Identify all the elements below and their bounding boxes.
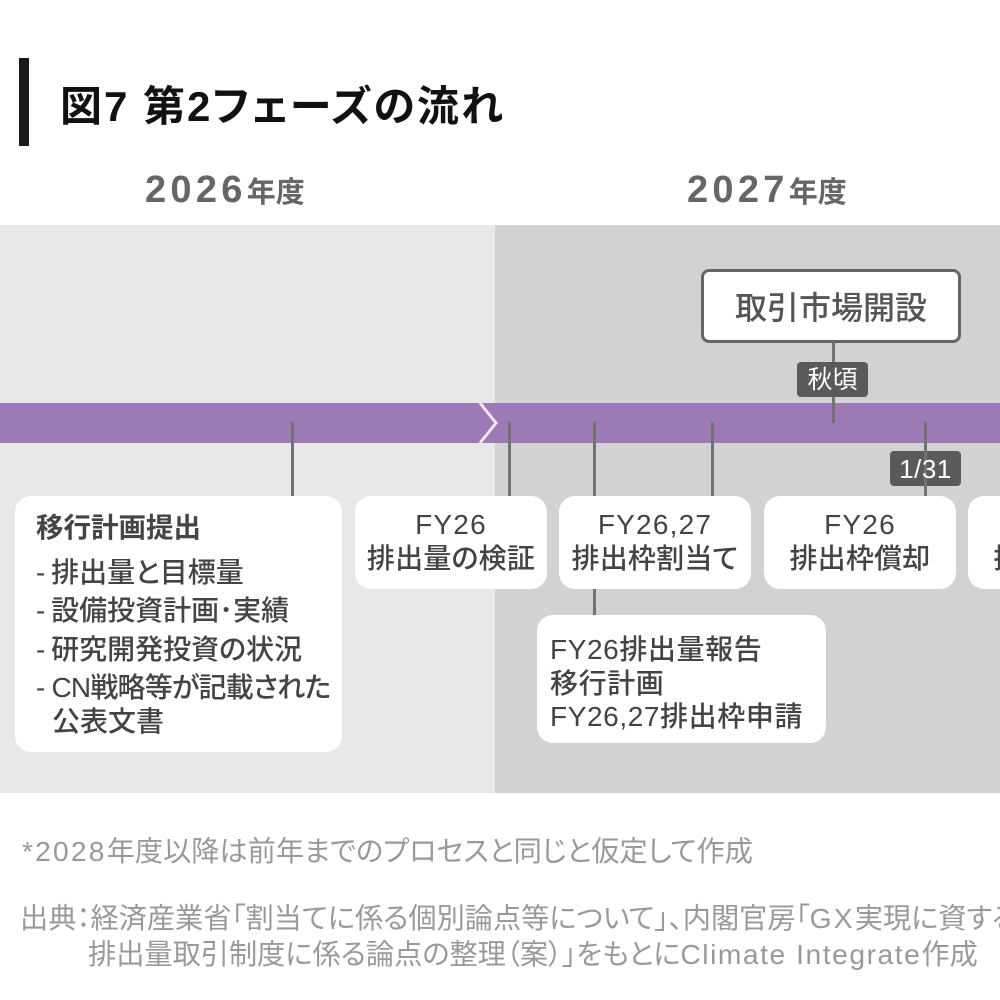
surrender text: FY26 [824, 509, 896, 540]
title: 図7 第2フェーズの流れ [60, 83, 505, 130]
plan list [36, 557, 330, 737]
panel: fiscal 2027 band [495, 225, 1000, 793]
plan list: - 研究開発投資の状況 [36, 634, 302, 665]
verification text: FY26 [415, 509, 487, 540]
surrender text [789, 509, 930, 574]
callout: market opening [701, 269, 961, 343]
connector: market opening [832, 340, 835, 423]
callout: market opening: 取引市場開設 [735, 290, 927, 326]
plan list: 公表文書 [52, 706, 164, 737]
plan heading: 移行計画提出 [36, 512, 201, 543]
verification text: 排出量の検証 [367, 543, 535, 574]
plan list: - 排出量と目標量 [36, 557, 244, 588]
allocation text: FY26,27 [598, 509, 712, 540]
surrender text: 排出枠償却 [789, 543, 930, 574]
tag: 1/31 [890, 451, 961, 486]
connector: allocation [593, 422, 596, 615]
connector: verification [508, 422, 511, 496]
report text: FY26排出量報告 [550, 634, 762, 665]
panel: fiscal 2026 band [0, 225, 495, 793]
allocation text: 排出枠割当て [572, 543, 738, 574]
panel: next item cut off [968, 496, 1000, 589]
connector: allocation right [711, 422, 714, 496]
plan list: - CN戦略等が記載された [36, 672, 330, 703]
allocation text [572, 509, 738, 574]
panel: surrender [764, 496, 956, 589]
connector: surrender [924, 422, 927, 496]
connector: plan submission [291, 422, 294, 496]
tag: autumn [797, 362, 868, 397]
panel: report and application [537, 615, 826, 743]
panel: allocation [559, 496, 751, 589]
heading: 2026: 2026年度 [145, 169, 305, 211]
footnote: *2028年度以降は前年までのプロセスと同じと仮定して作成 [22, 835, 753, 867]
panel: FY26 verification [355, 496, 547, 589]
report text: 移行計画 [550, 668, 664, 698]
verification text [367, 509, 535, 574]
panel: transition plan submission [15, 496, 342, 752]
title accent bar [19, 58, 29, 146]
tag: autumn: 秋頃 [807, 366, 858, 394]
report text: FY26,27排出枠申請 [550, 701, 803, 732]
report text [550, 634, 803, 732]
heading: 2027: 2027年度 [687, 169, 847, 211]
tag: 1/31: 1/31 [899, 454, 952, 484]
plan list: - 設備投資計画･実績 [36, 595, 289, 626]
icon: chevron on timeline [478, 402, 498, 444]
timeline arrow bar [0, 403, 1000, 443]
source line 2: 排出量取引制度に係る論点の整理（案）」をもとにClimate Integrate作成 [88, 938, 978, 970]
